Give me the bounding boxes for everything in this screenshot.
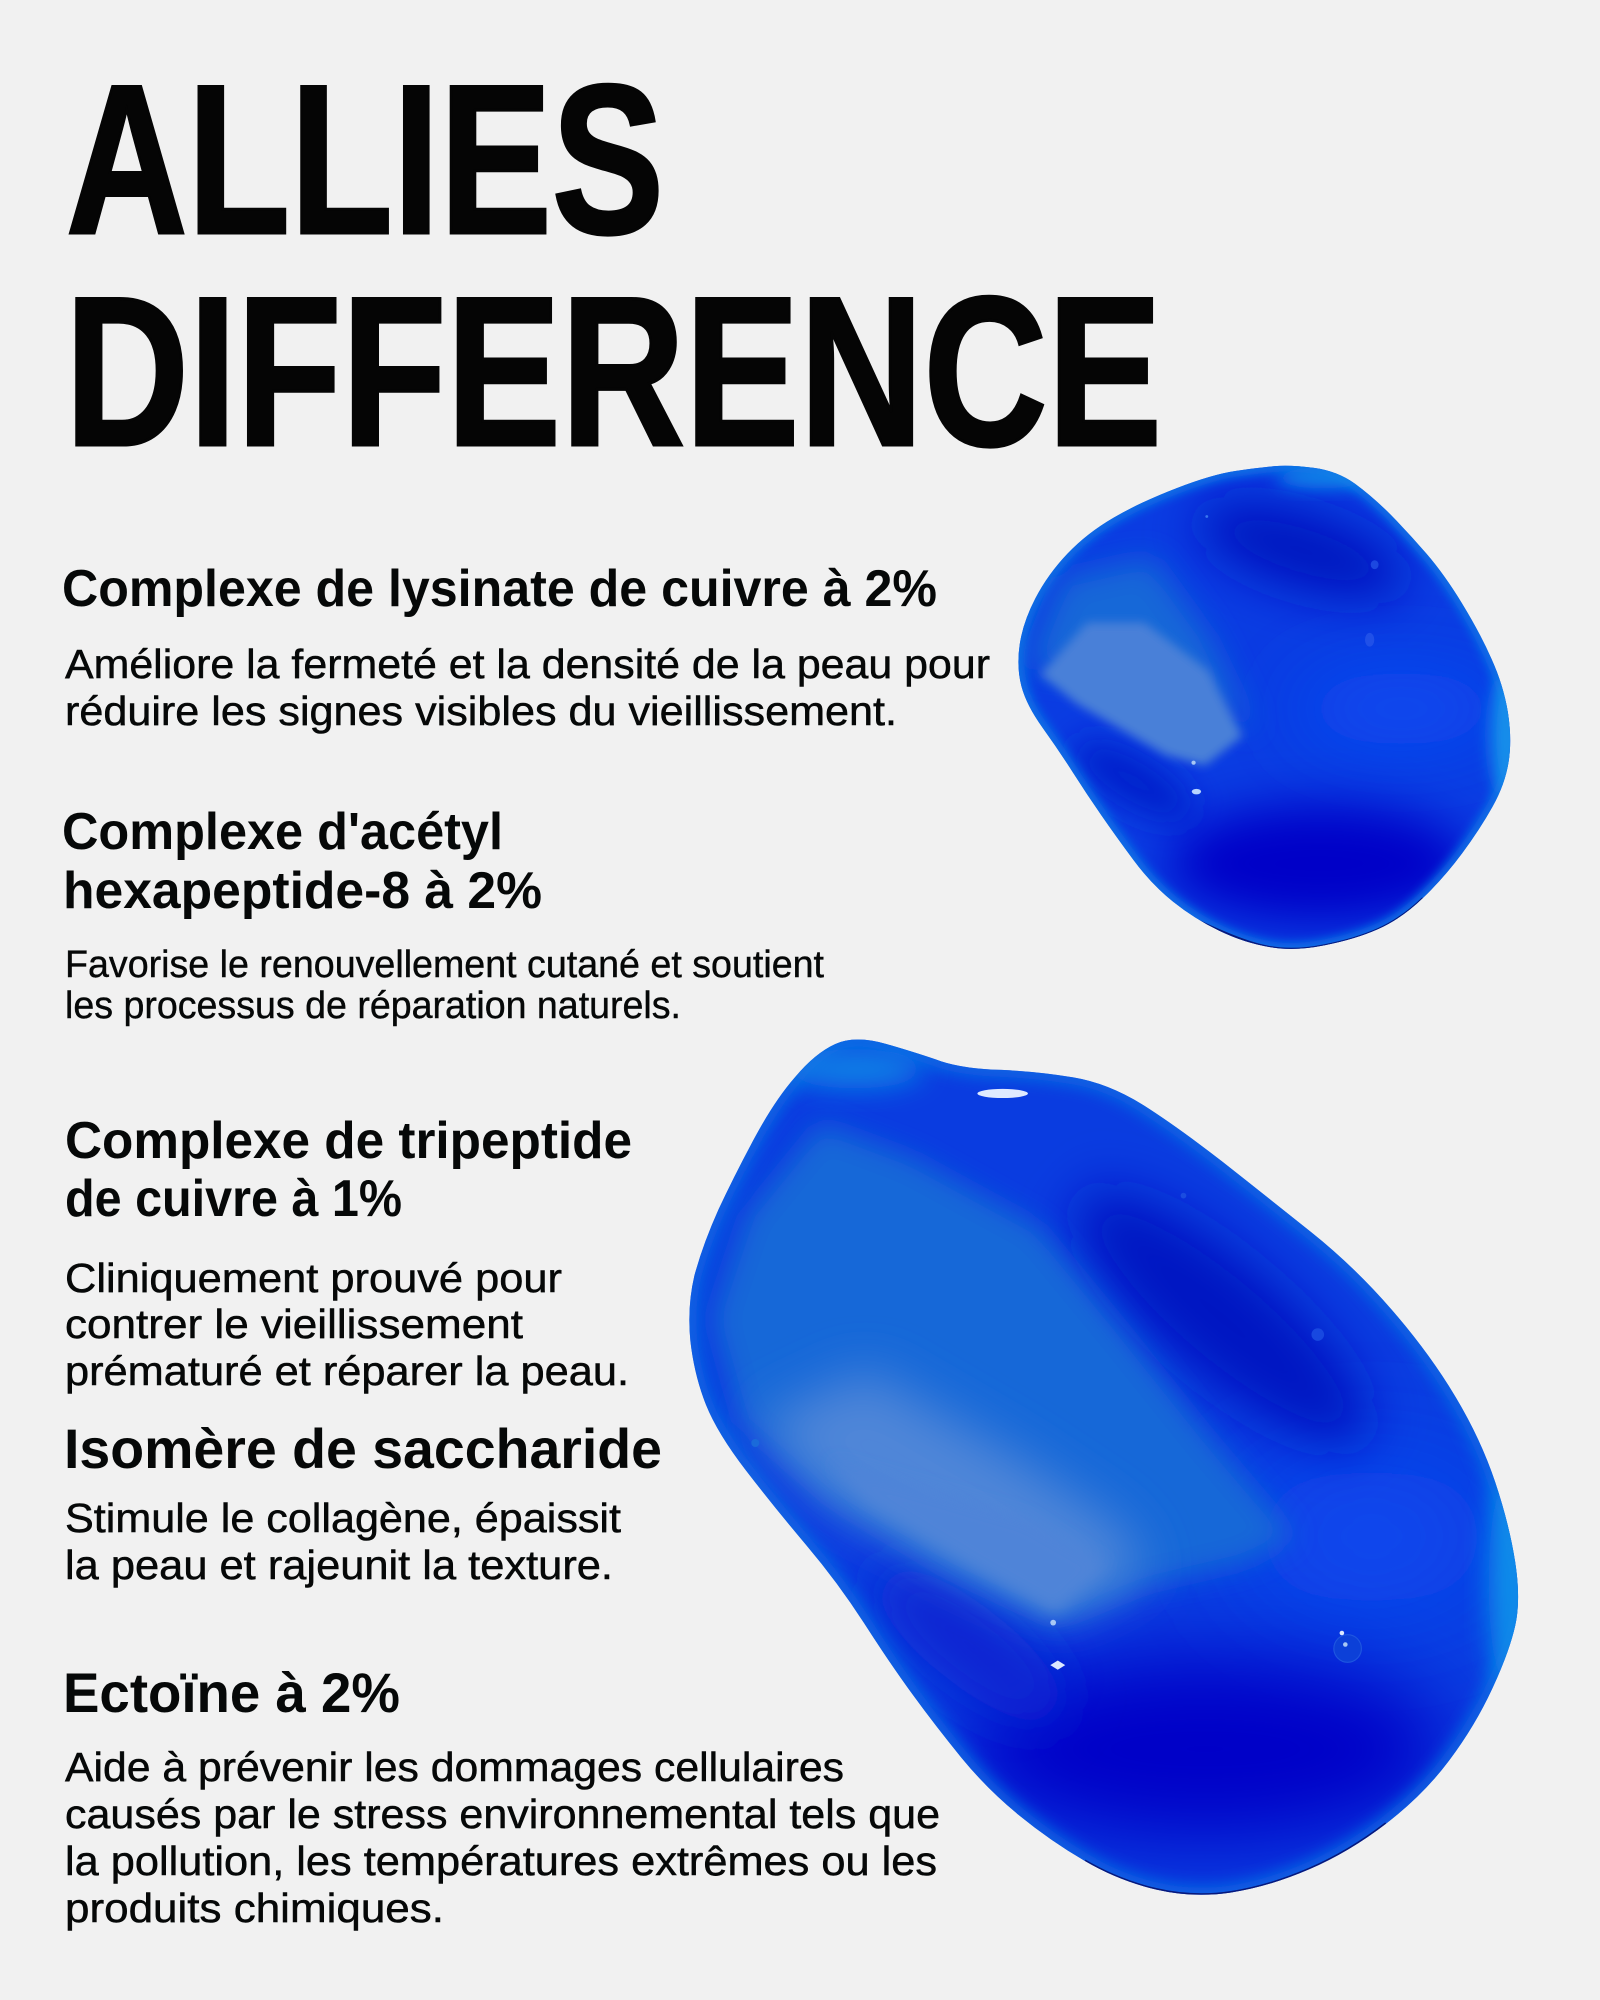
title: ALLIES [66,41,664,279]
text block: Stimule le collagène, épaissit [65,1495,622,1541]
blob: large blue serum drop [689,1040,1530,1895]
heading: Ectoïne à 2% [63,1661,400,1724]
text block [65,1255,629,1394]
text block [65,1495,622,1588]
section: Isomère de saccharide [64,1417,662,1588]
text block [65,641,990,734]
text block: les processus de réparation naturels. [65,985,681,1027]
text block: Cliniquement prouvé pour [65,1255,562,1301]
text block: la peau et rajeunit la texture. [65,1542,613,1588]
heading [65,1112,632,1228]
highlights [1191,515,1379,794]
highlights [751,1089,1361,1670]
heading: Complexe de tripeptide [65,1112,632,1170]
heading: Complexe de lysinate de cuivre à 2% [62,560,937,618]
section: Complexe de tripeptide de cuivre [65,1112,632,1394]
text block: produits chimiques. [65,1885,444,1931]
heading: de cuivre à 1% [65,1170,402,1228]
text block: contrer le vieillissement [65,1301,524,1347]
heading: Isomère de saccharide [64,1417,662,1480]
text block: causés par le stress environnemental tels que [65,1791,940,1837]
heading: hexapeptide-8 à 2% [63,862,542,920]
heading: Complexe d'acétyl [62,803,503,861]
text block: Favorise le renouvellement cutané et soutient [65,944,824,986]
text block [65,1744,940,1931]
text block: Aide à prévenir les dommages cellulaires [65,1744,844,1790]
text block: réduire les signes visibles du vieillissement. [65,688,897,734]
title [65,41,1162,491]
heading [62,803,542,920]
text block: prématuré et réparer la peau. [65,1348,629,1394]
text block: Améliore la fermeté et la densité de la peau pour [65,641,990,687]
text block [65,944,824,1027]
title: DIFFERENCE [65,253,1162,491]
section: Ectoïne [63,1661,940,1931]
section: Complexe d'acétyl hexapeptide-8 [62,803,824,1027]
section: Complexe de lysinate de cuivre [62,560,990,734]
blob: small blue serum drop [1018,466,1519,949]
text block: la pollution, les températures extrêmes ou les [65,1838,937,1884]
